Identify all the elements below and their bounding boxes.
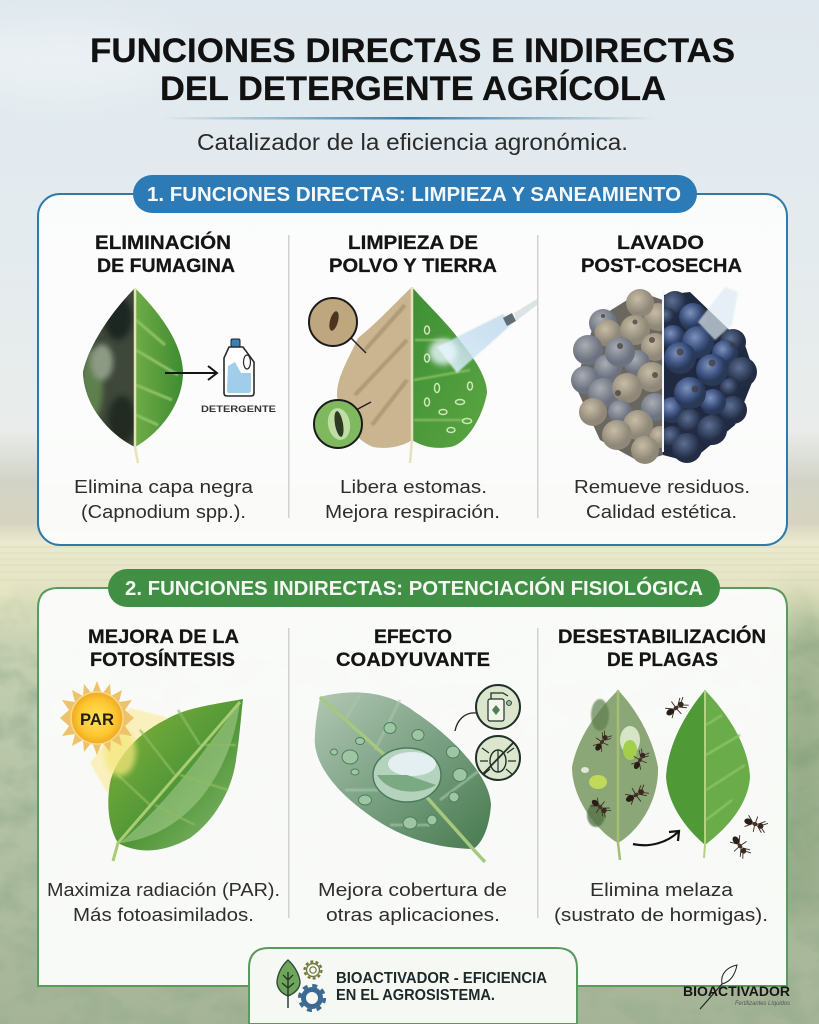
text: plagas description — [554, 880, 768, 925]
heading: coadyuvante — [336, 627, 490, 671]
icon: PAR sun: PAR — [80, 710, 114, 729]
arrow: leaf to detergent — [165, 366, 217, 380]
logo: Bioactivador: BIOACTIVADOR — [683, 983, 790, 999]
text: footer message: EN EL AGROSISTEMA. — [336, 987, 495, 1004]
icon: half-sooty leaf — [81, 288, 183, 463]
arrow: infested to clean leaf — [633, 831, 679, 845]
title: DEL DETERGENTE AGRÍCOLA — [160, 70, 666, 108]
icon: sunlit leaf — [90, 699, 243, 861]
icon: sprayer badge — [455, 685, 520, 731]
heading pill: section 2 — [108, 569, 720, 607]
text: post-cosecha description: Remueve residuos. — [574, 477, 750, 497]
text: fotosintesis description — [47, 880, 280, 925]
label: detergente: DETERGENTE — [201, 404, 276, 415]
text: fumagina description: (Capnodium spp.). — [81, 502, 246, 522]
heading: coadyuvante: EFECTO — [374, 627, 452, 648]
icon: leaf with gears — [277, 960, 324, 1010]
logo: Bioactivador — [683, 965, 790, 1009]
heading: fotosintesis — [88, 627, 239, 671]
heading pill: section 1: 1. FUNCIONES DIRECTAS: LIMPIEZA Y SANEAMIENTO — [147, 184, 681, 206]
heading: coadyuvante: COADYUVANTE — [336, 650, 490, 671]
icon: half dusty leaf — [337, 287, 487, 463]
text: polvo description — [325, 477, 500, 522]
icon: ants around leaf — [662, 695, 769, 860]
icon: infested leaf — [572, 690, 658, 860]
heading: post-cosecha: LAVADO — [617, 233, 704, 254]
heading: plagas: DE PLAGAS — [607, 650, 718, 671]
icon: PAR sun — [60, 681, 134, 755]
heading: post-cosecha: POST-COSECHA — [581, 256, 742, 277]
title: FUNCIONES DIRECTAS E INDIRECTAS — [90, 32, 735, 70]
footer callout — [249, 948, 577, 1024]
icon: blueberries dirty and clean — [571, 287, 757, 464]
icon: clean leaf — [666, 690, 750, 858]
icon: detergent bottle — [224, 339, 254, 396]
text: polvo description: Libera estomas. — [340, 477, 487, 497]
text: fumagina description: Elimina capa negra — [74, 477, 254, 497]
icon: leaf with droplets — [315, 692, 491, 862]
title divider — [162, 117, 658, 120]
text: post-cosecha description — [574, 477, 750, 522]
heading: fumagina: DE FUMAGINA — [97, 256, 235, 277]
heading: polvo y tierra: LIMPIEZA DE — [348, 233, 478, 254]
logo: Bioactivador: Fertilizantes Líquidos — [735, 1001, 790, 1007]
icon: crossed insect badge — [476, 736, 520, 780]
heading: polvo y tierra — [329, 233, 497, 277]
heading: fotosintesis: MEJORA DE LA — [88, 627, 239, 648]
heading: fumagina: ELIMINACIÓN — [95, 232, 231, 254]
title — [90, 32, 735, 108]
text: polvo description: Mejora respiración. — [325, 502, 500, 522]
heading: plagas — [558, 626, 766, 671]
panel: direct functions — [38, 175, 787, 545]
heading: fotosintesis: FOTOSÍNTESIS — [90, 649, 235, 671]
icon: water spray — [429, 299, 537, 373]
text: fotosintesis description: Maximiza radiación (PAR). — [47, 880, 280, 900]
text: plagas description: (sustrato de hormigas). — [554, 905, 768, 925]
icon: clean stoma magnifier — [314, 400, 371, 448]
heading pill: section 2: 2. FUNCIONES INDIRECTAS: POTENCIACIÓN FISIOLÓGICA — [125, 576, 703, 600]
heading: polvo y tierra: POLVO Y TIERRA — [329, 256, 497, 277]
heading: plagas: DESESTABILIZACIÓN — [558, 626, 766, 648]
text: footer message — [336, 970, 547, 1004]
text: coadyuvante description: Mejora cobertura de — [318, 880, 507, 900]
panel: indirect functions — [38, 569, 787, 986]
heading pill: section 1 — [133, 175, 697, 213]
heading: fumagina — [95, 232, 235, 277]
text: fumagina description — [74, 477, 254, 522]
text: footer message: BIOACTIVADOR - EFICIENCIA — [336, 970, 547, 987]
heading: post-cosecha — [581, 233, 742, 277]
text: coadyuvante description: otras aplicaciones. — [326, 905, 500, 925]
text: plagas description: Elimina melaza — [590, 880, 734, 900]
text: post-cosecha description: Calidad estética. — [586, 502, 737, 522]
text: coadyuvante description — [318, 880, 507, 925]
subtitle: Catalizador de la eficiencia agronómica. — [197, 129, 628, 155]
text: fotosintesis description: Más fotoasimilados. — [73, 905, 254, 925]
icon: dusty stoma magnifier — [309, 298, 366, 353]
